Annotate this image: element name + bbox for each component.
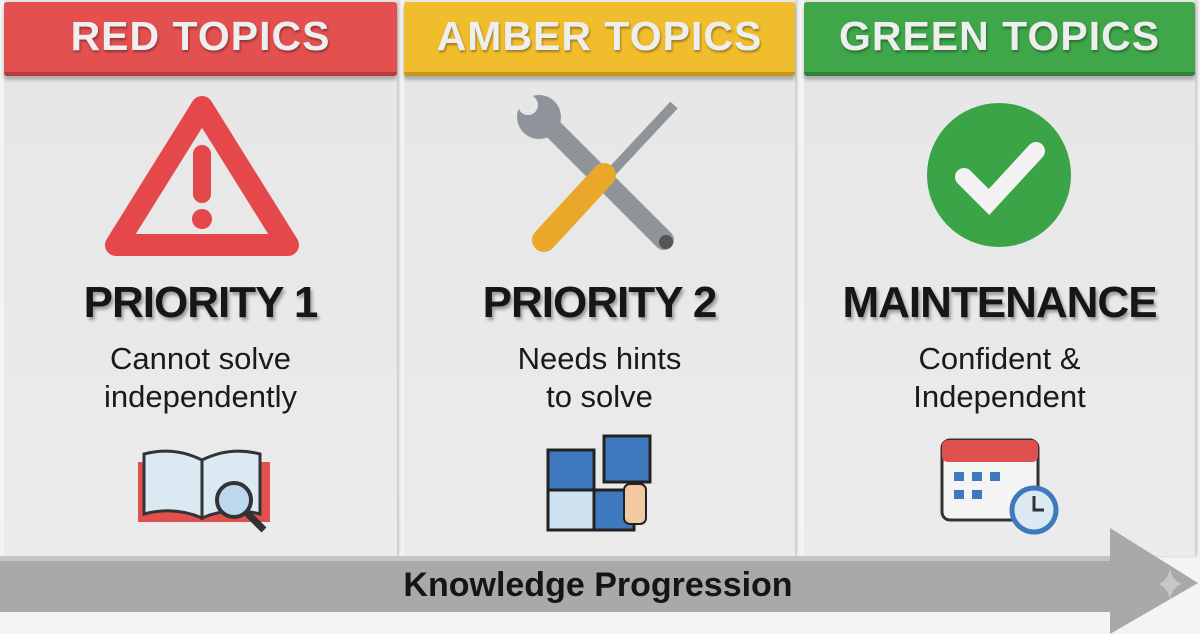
text: cannot solve independently: Cannot solve <box>110 341 291 376</box>
text: needs hints to solve <box>518 341 681 414</box>
header: amber topics: AMBER TOPICS <box>437 13 762 59</box>
heading: priority 1: PRIORITY 1 <box>84 278 317 327</box>
text: cannot solve independently: independently <box>104 379 297 414</box>
icon: wrench and screwdriver <box>517 95 678 252</box>
header: green topics: GREEN TOPICS <box>839 13 1160 59</box>
text: confident & independent: Independent <box>913 379 1086 414</box>
panel: green topics <box>804 0 1195 556</box>
text: needs hints to solve: to solve <box>546 379 653 414</box>
text: needs hints to solve: Needs hints <box>518 341 681 376</box>
icon: book with magnifier <box>138 450 270 532</box>
arrow: knowledge progression <box>0 528 1198 634</box>
text: confident & independent <box>913 341 1086 414</box>
heading: priority 2: PRIORITY 2 <box>483 278 716 327</box>
panel: red topics <box>4 0 397 556</box>
header: green topics <box>804 2 1195 76</box>
heading: maintenance: MAINTENANCE <box>842 278 1157 327</box>
icon: check circle <box>927 103 1071 247</box>
icon: warning triangle <box>105 96 299 256</box>
text: confident & independent: Confident & <box>918 341 1080 376</box>
icon: puzzle pieces with hand <box>546 434 652 532</box>
arrow: knowledge progression: Knowledge Progression <box>403 566 793 604</box>
text: cannot solve independently <box>104 341 297 414</box>
header: red topics <box>4 2 397 76</box>
header: amber topics <box>404 2 795 76</box>
icon: calendar with clock <box>940 438 1058 534</box>
panel: amber topics <box>404 0 795 556</box>
header: red topics: RED TOPICS <box>71 13 330 59</box>
